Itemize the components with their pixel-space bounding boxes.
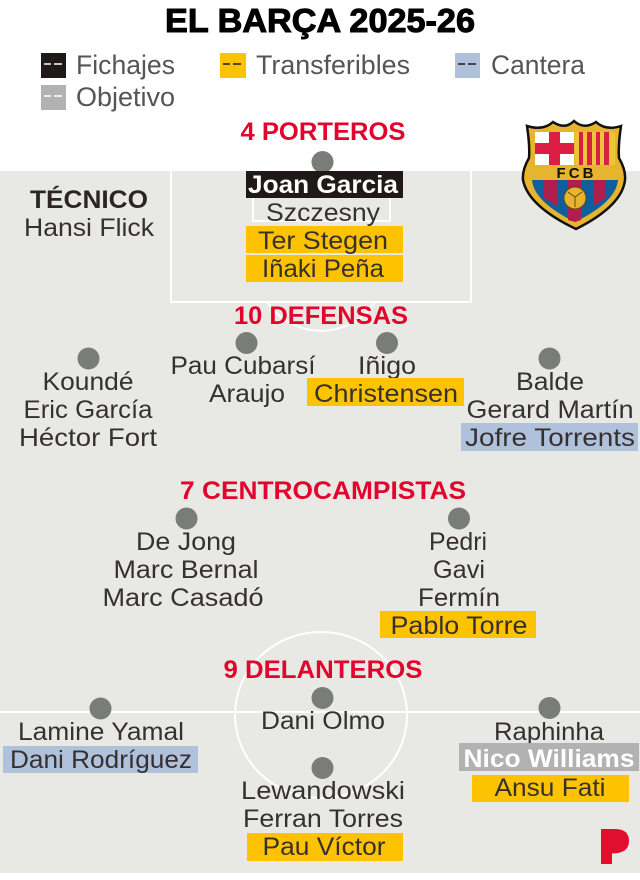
transfer listed: Iñaki Peña: Iñaki Peña [262, 255, 384, 283]
academy: Dani Rodríguez: Dani Rodríguez [10, 746, 192, 774]
left-back group: Balde [516, 368, 584, 396]
striker group: Ferran Torres [243, 805, 403, 833]
icon: FC Barcelona crest: FCB [556, 165, 594, 182]
transfer listed: Pablo Torre: Pablo Torre [390, 612, 528, 640]
right-back group [19, 348, 157, 452]
midfield group right [380, 508, 536, 640]
heading: defensas: 10 DEFENSAS [234, 302, 408, 330]
icon: publisher logo [601, 829, 629, 864]
transfer listed: Pau Víctor: Pau Víctor [262, 833, 386, 861]
heading: porteros: 4 PORTEROS [240, 118, 406, 146]
left-wing group: Raphinha [494, 718, 604, 746]
midfield group right: Pedri [429, 528, 487, 556]
attacking midfield group [261, 687, 385, 735]
academy: Jofre Torrents: Jofre Torrents [465, 424, 635, 452]
right-wing group: Lamine Yamal [18, 718, 184, 746]
legend item: Cantera: Cantera [491, 50, 586, 80]
left-wing group [459, 697, 639, 802]
legend [41, 50, 586, 112]
transfer listed: Ansu Fati: Ansu Fati [494, 774, 606, 802]
transfer listed: Ter Stegen: Ter Stegen [258, 227, 388, 255]
transfer listed: Christensen: Christensen [314, 380, 458, 408]
striker group: Lewandowski [241, 777, 405, 805]
legend item: Objetivo: Objetivo [76, 82, 175, 112]
left-back group: Gerard Martín [466, 396, 634, 424]
coach block [24, 185, 155, 242]
transfer listed: Ansu Fati [472, 774, 629, 802]
midfield group left: De Jong [136, 528, 236, 556]
centre-back group right [307, 332, 464, 408]
legend item: Transferibles: Transferibles [256, 50, 410, 80]
player dot [312, 151, 334, 173]
heading: delanteros: 9 DELANTEROS [224, 656, 422, 684]
midfield group left [102, 508, 264, 612]
left-back group [461, 348, 638, 452]
icon: FC Barcelona crest [523, 121, 625, 229]
centre-back group left [170, 332, 316, 408]
coach heading: TÉCNICO [30, 185, 148, 214]
right-wing group [3, 698, 198, 774]
right-back group: Héctor Fort [19, 424, 157, 452]
striker group [241, 757, 405, 861]
midfield group right: Fermín [418, 584, 500, 612]
legend item: Fichajes: Fichajes [76, 50, 175, 80]
heading: centrocampistas: 7 CENTROCAMPISTAS [180, 477, 466, 505]
coach name: Hansi Flick [24, 214, 155, 242]
title: EL BARÇA 2025-26 [165, 2, 475, 39]
centre-back group right: Iñigo [358, 352, 416, 380]
right-back group: Eric García [24, 396, 153, 424]
centre-back group left: Araujo [209, 380, 285, 408]
right-back group: Koundé [42, 368, 134, 396]
attacking midfield group: Dani Olmo [261, 707, 385, 735]
player: Szczesny: Szczesny [266, 199, 381, 227]
midfield group left: Marc Bernal [114, 556, 258, 584]
target: Nico Williams: Nico Williams [464, 745, 634, 773]
highlighted signing: Joan Garcia: Joan Garcia [248, 171, 399, 199]
midfield group right: Gavi [433, 556, 485, 584]
centre-back group left: Pau Cubarsí [170, 352, 316, 380]
midfield group left: Marc Casadó [102, 584, 264, 612]
goalkeepers group [246, 151, 403, 283]
